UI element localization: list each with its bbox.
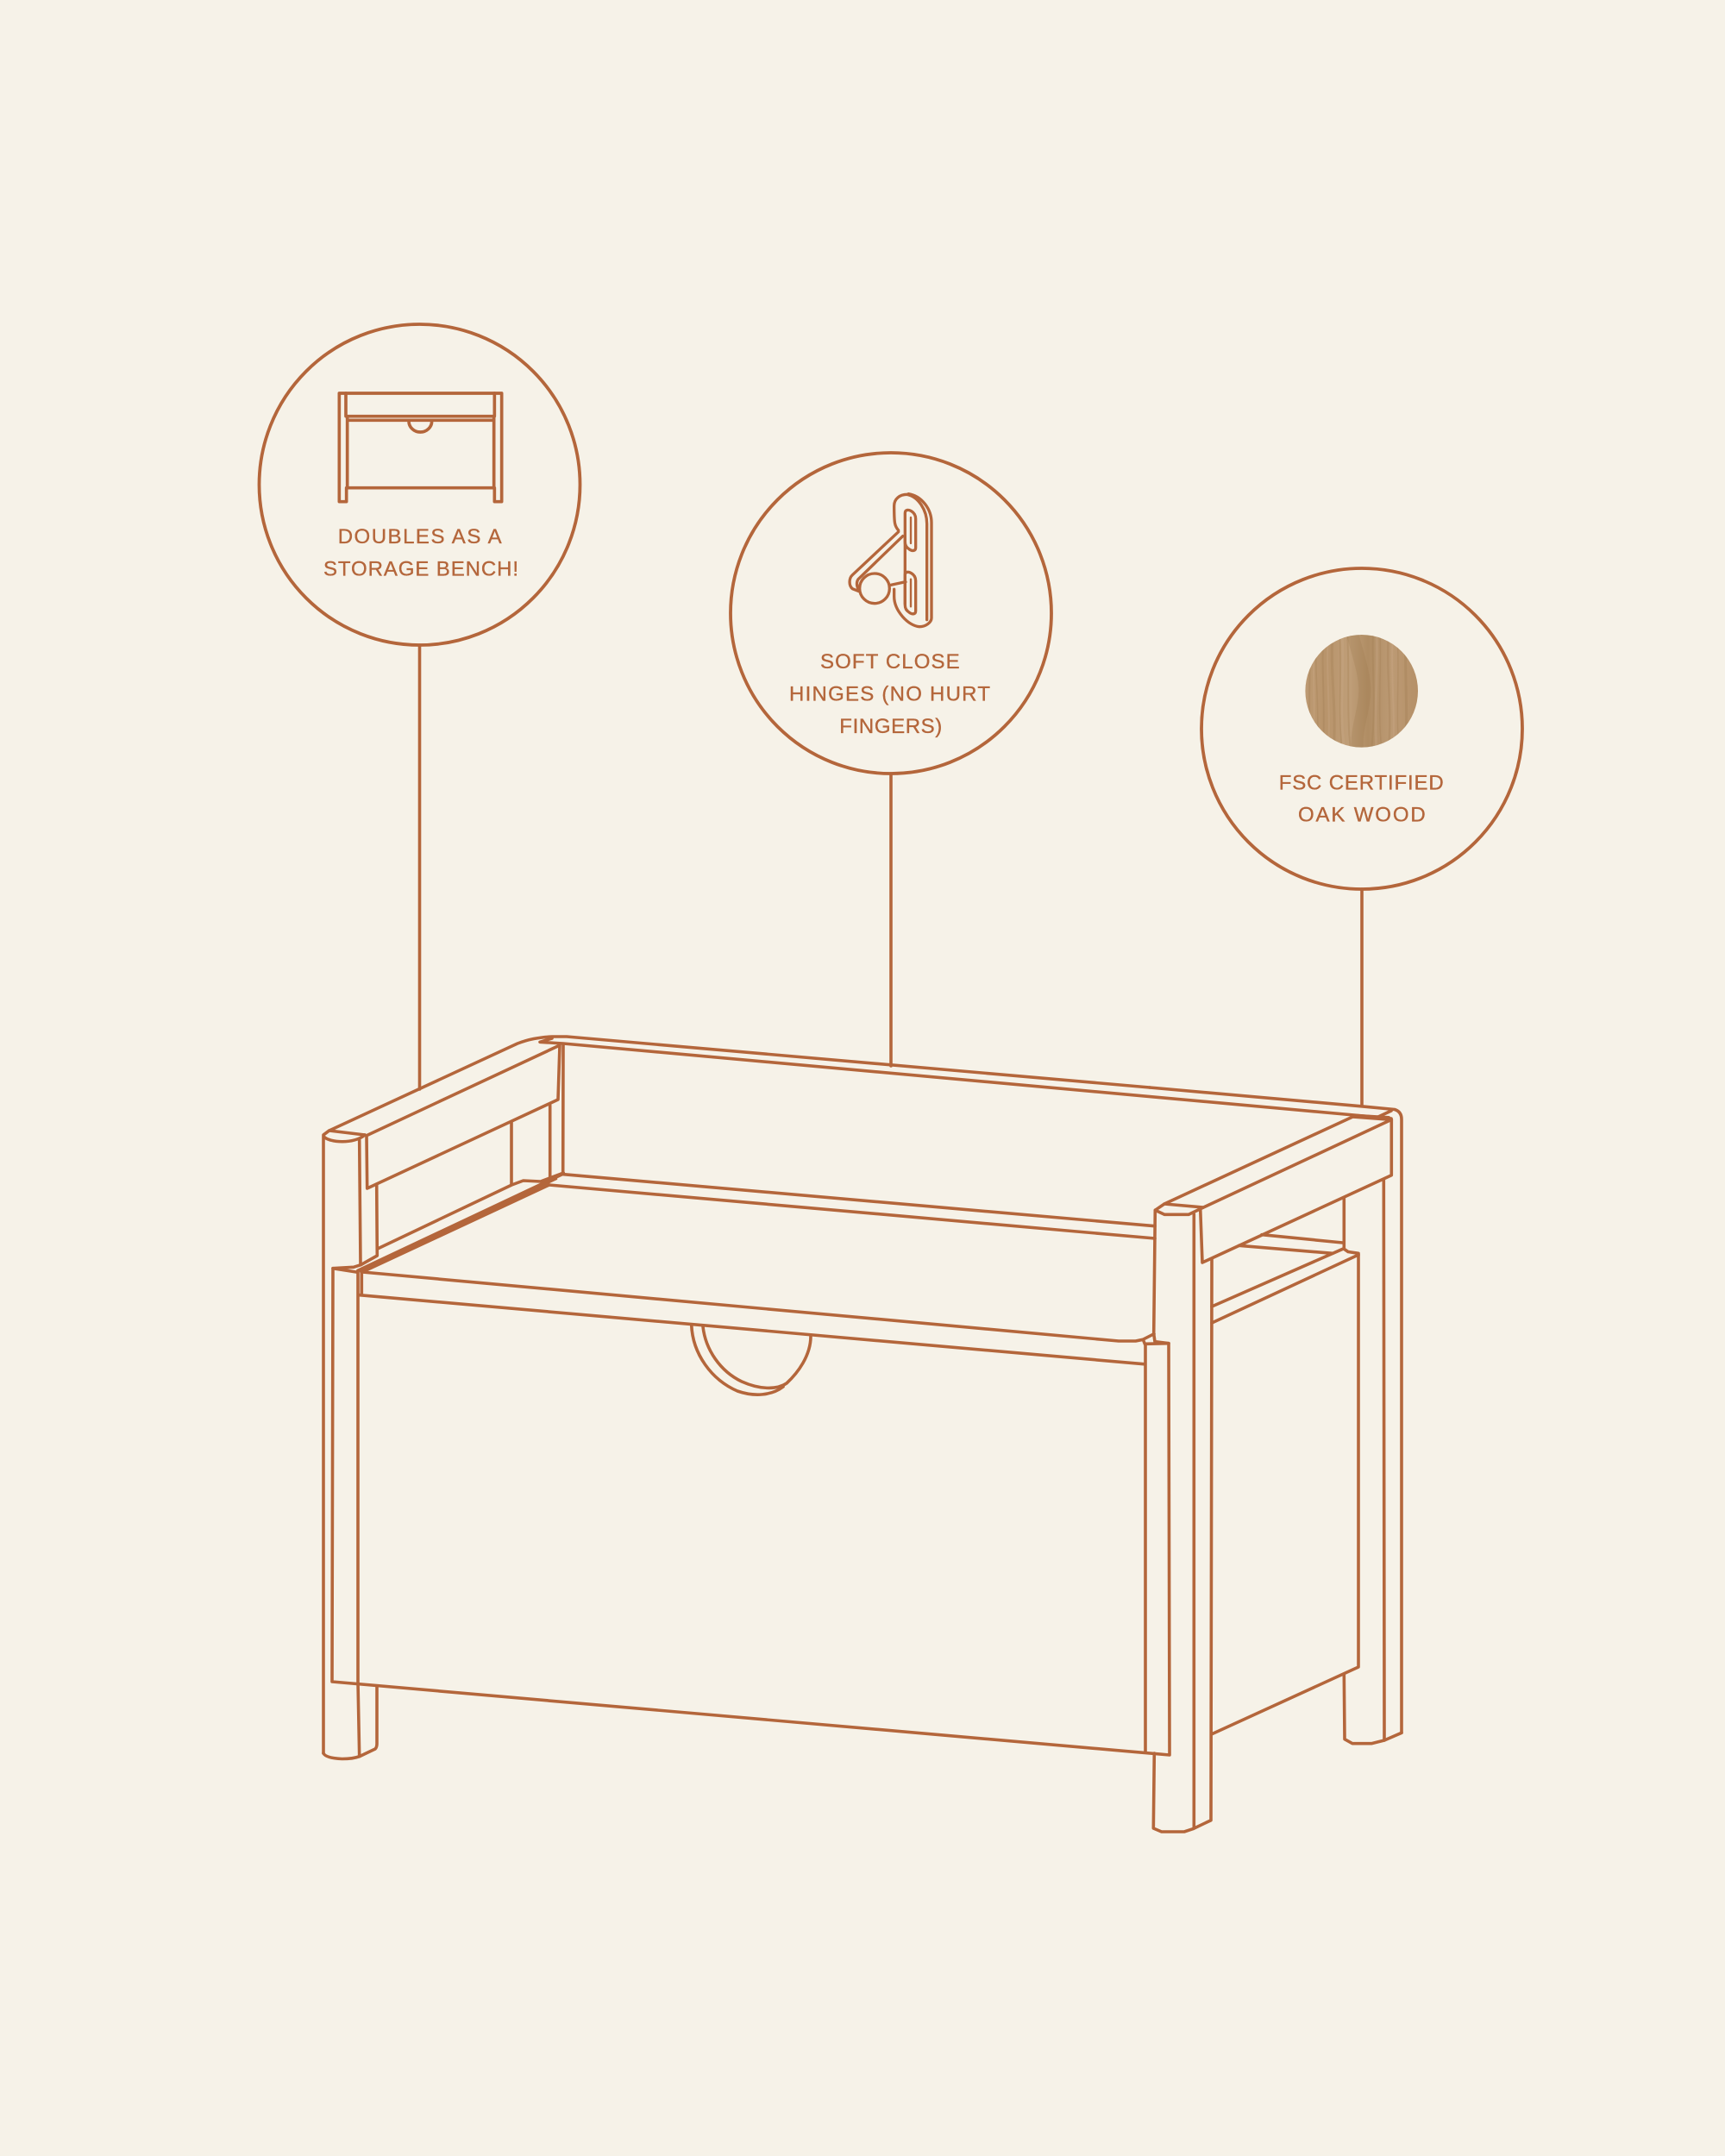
- label: soft close hinges: FINGERS): [839, 715, 942, 738]
- callout circle: [259, 324, 580, 645]
- icon: bench front view: [339, 393, 502, 502]
- seat lid: [358, 1174, 1154, 1364]
- label: doubles as a storage bench: STORAGE BENCH!: [323, 557, 518, 580]
- callout circle: [1201, 568, 1522, 889]
- left front post: [323, 1131, 377, 1759]
- right side panel and rear post: [1212, 1180, 1402, 1744]
- label: doubles as a storage bench: DOUBLES AS A: [338, 525, 502, 548]
- icon: oak wood sample: [1302, 631, 1421, 750]
- icon: hinge: [850, 494, 932, 627]
- connector line: [1360, 889, 1364, 1106]
- left arm rest: [329, 1037, 1150, 1249]
- right front post: [1153, 1204, 1212, 1832]
- right arm rest: [1164, 1111, 1391, 1263]
- connector line: [889, 774, 893, 1066]
- illustration: storage bench: [323, 1037, 1402, 1832]
- callout circle: [731, 453, 1051, 774]
- connector line: [418, 645, 421, 1089]
- callout: FSC certified oak wood: [1201, 568, 1522, 1106]
- label: soft close hinges: HINGES (NO HURT: [789, 683, 990, 706]
- label: soft close hinges: SOFT CLOSE: [820, 650, 960, 674]
- label: FSC certified oak wood: OAK WOOD: [1298, 804, 1426, 827]
- back rails: [540, 1038, 1402, 1733]
- label: FSC certified oak wood: FSC CERTIFIED: [1279, 772, 1444, 795]
- callout: storage bench: [259, 324, 580, 1089]
- lid handle cut-out: [692, 1325, 811, 1395]
- callout: soft close hinges: [731, 453, 1051, 1066]
- front panel: [332, 1269, 1170, 1755]
